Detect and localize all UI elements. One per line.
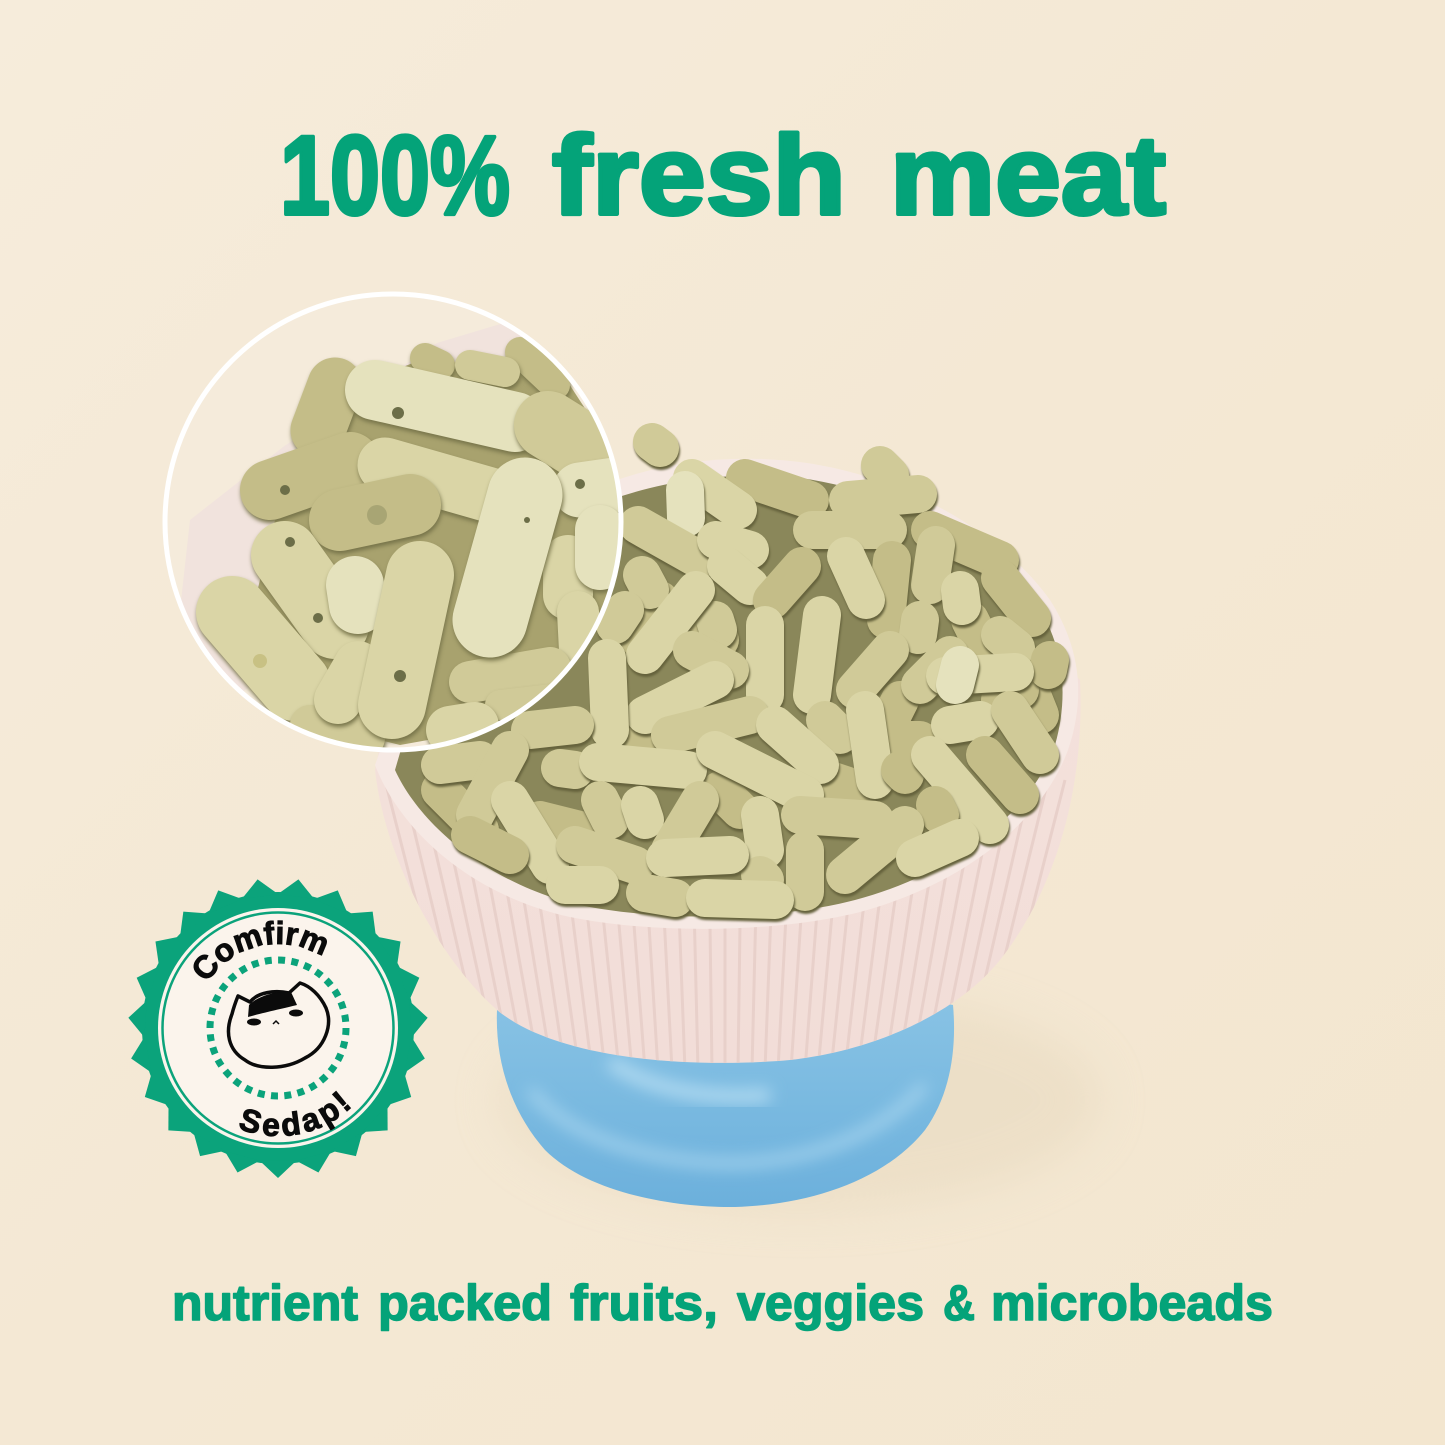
magnifier circle: zoomed-in pellets bbox=[165, 294, 625, 750]
food pellets in bowl bbox=[440, 442, 1050, 900]
ground shadow bbox=[500, 990, 1100, 1210]
subtitle bbox=[172, 1275, 1273, 1331]
badge: cat face icon bbox=[228, 983, 328, 1067]
title: 100% bbox=[280, 113, 510, 238]
subtitle: fruits, bbox=[570, 1275, 718, 1331]
title: meat bbox=[890, 113, 1166, 238]
badge: inner disc bbox=[158, 908, 398, 1148]
subtitle: veggies bbox=[737, 1275, 924, 1331]
subtitle: packed bbox=[378, 1275, 552, 1331]
subtitle: nutrient bbox=[172, 1275, 358, 1331]
badge: green starburst bbox=[127, 877, 429, 1178]
bowl: blue base bbox=[497, 960, 954, 1207]
zoomed pellet specks bbox=[253, 407, 585, 682]
bowl: rim bbox=[375, 459, 1078, 929]
bowl: pink ribbed body bbox=[375, 679, 1080, 1063]
zoomed bowl rim bbox=[180, 315, 560, 700]
subtitle: & bbox=[943, 1275, 975, 1331]
title bbox=[280, 113, 1166, 238]
badge: bottom text: Sedap! bbox=[239, 1090, 352, 1137]
subtitle: microbeads bbox=[991, 1275, 1273, 1331]
badge: Comfirm Sedap! bbox=[128, 879, 428, 1178]
zoomed pellets bbox=[232, 352, 625, 745]
badge: top text: Comfirm bbox=[194, 920, 327, 978]
title: fresh bbox=[552, 113, 846, 238]
